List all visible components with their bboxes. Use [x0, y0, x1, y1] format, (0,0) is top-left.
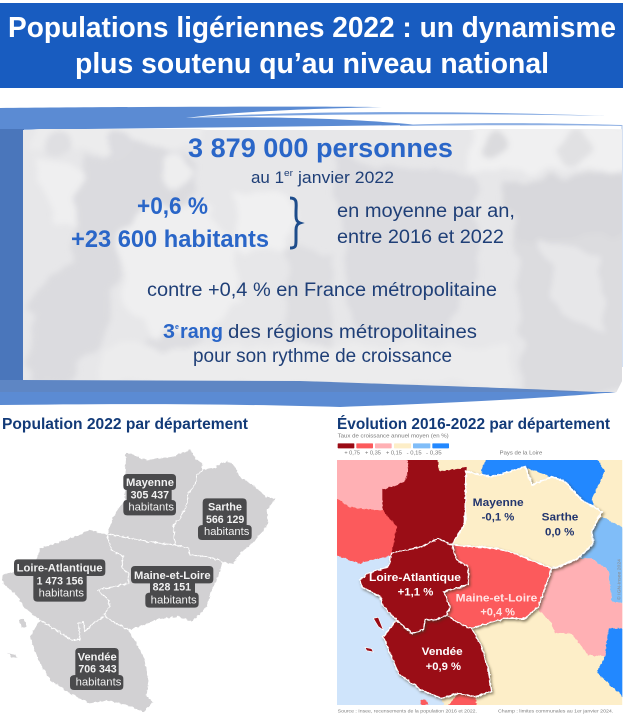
label: Sarthe — [198, 498, 252, 540]
date: au 1 — [251, 168, 284, 187]
label: Sarthe: habitants — [204, 526, 250, 538]
map labels: Maine-et-Loire — [456, 592, 537, 604]
map labels: Mayenne — [473, 497, 524, 509]
title banner — [0, 3, 623, 88]
title banner: Populations ligériennes 2022 : un dynamisme — [8, 12, 616, 44]
legend: - 0,35 — [426, 450, 442, 456]
blue lower band — [0, 392, 616, 407]
legend: Taux de croissance annuel moyen (en %) — [338, 433, 449, 439]
period note: entre 2016 et 2022 — [337, 227, 504, 248]
map labels: 0,0 % — [545, 526, 574, 538]
label: Sarthe: Sarthe — [208, 502, 242, 514]
label: Vendée — [70, 648, 123, 690]
label: Maine-et-Loire — [131, 566, 213, 608]
label: Loire-Atlantique: 1 473 156 — [37, 576, 83, 588]
label: Mayenne: habitants — [128, 502, 174, 514]
label: Sarthe: 566 129 — [206, 514, 244, 526]
department: Vendée — [383, 615, 492, 698]
map panel: evolution by department — [332, 433, 627, 714]
label: Loire-Atlantique — [14, 559, 105, 602]
ranking: rang — [180, 321, 223, 343]
comparison with France: contre +0,4 % en France métropolitaine — [147, 280, 497, 301]
heading: evolution: Évolution 2016-2022 par département — [337, 414, 611, 433]
label: Maine-et-Loire: habitants — [151, 594, 197, 606]
headline figure: 3 879 000 personnes — [188, 133, 453, 163]
growth figures: +0,6 % — [137, 193, 208, 220]
ranking: 3 — [163, 321, 175, 343]
map labels: Loire-Atlantique — [369, 572, 461, 584]
panel: key figures — [0, 107, 633, 407]
ranking: e — [175, 324, 179, 331]
source note: Source : Insee, recensements de la population 2016 et 2022. — [338, 708, 477, 714]
label: Maine-et-Loire: Maine-et-Loire — [134, 570, 211, 582]
growth figures — [71, 193, 269, 253]
ranking: des régions métropolitaines — [228, 322, 477, 343]
map labels: +0,9 % — [426, 661, 461, 673]
source note: Champ : limites communales au 1er janvier 2024. — [498, 708, 613, 714]
background crowd photo — [0, 120, 633, 395]
legend: + 0,35 — [365, 450, 381, 456]
copyright: © IGN-Insee 2024 — [616, 558, 621, 600]
heading: population: Population 2022 par département — [2, 416, 249, 433]
department: Loire-Atlantique — [360, 538, 468, 633]
brace — [290, 198, 300, 248]
department: Mayenne and Sarthe — [452, 467, 602, 568]
legend: - 0,15 — [407, 450, 422, 456]
ranking — [163, 321, 477, 367]
title banner: plus soutenu qu’au niveau national — [75, 48, 549, 80]
date — [251, 168, 394, 187]
growth figures: +23 600 habitants — [71, 226, 269, 253]
legend — [338, 433, 542, 456]
date: er — [284, 168, 293, 178]
label: Mayenne: Mayenne — [126, 477, 174, 489]
label: Vendée: habitants — [76, 677, 122, 689]
label: Loire-Atlantique: Loire-Atlantique — [17, 563, 103, 575]
map labels: Vendée — [422, 646, 463, 658]
map: population by department — [2, 449, 276, 712]
label: Vendée: Vendée — [78, 652, 117, 664]
blue brush frame — [0, 107, 622, 393]
label: Loire-Atlantique: habitants — [39, 588, 84, 600]
legend: + 0,75 — [344, 450, 360, 456]
date: janvier 2022 — [297, 168, 394, 187]
map shape — [2, 449, 276, 712]
legend: Pays de la Loire — [500, 450, 542, 456]
legend: + 0,15 — [386, 450, 402, 456]
label: Maine-et-Loire: 828 151 — [153, 582, 191, 594]
period note — [337, 201, 515, 248]
choropleth map — [332, 455, 627, 710]
map labels: -0,1 % — [482, 512, 514, 524]
label: Mayenne — [123, 474, 176, 515]
map labels: +1,1 % — [398, 587, 433, 599]
period note: en moyenne par an, — [337, 201, 515, 222]
department: Maine-et-Loire — [443, 545, 552, 628]
label: Mayenne: 305 437 — [131, 490, 169, 502]
map labels: Sarthe — [542, 512, 578, 524]
map labels — [369, 497, 578, 673]
label: Vendée: 706 343 — [78, 664, 117, 676]
islands — [365, 617, 383, 652]
source note — [338, 708, 613, 714]
map labels: +0,4 % — [480, 607, 515, 619]
ranking: pour son rythme de croissance — [193, 346, 452, 367]
